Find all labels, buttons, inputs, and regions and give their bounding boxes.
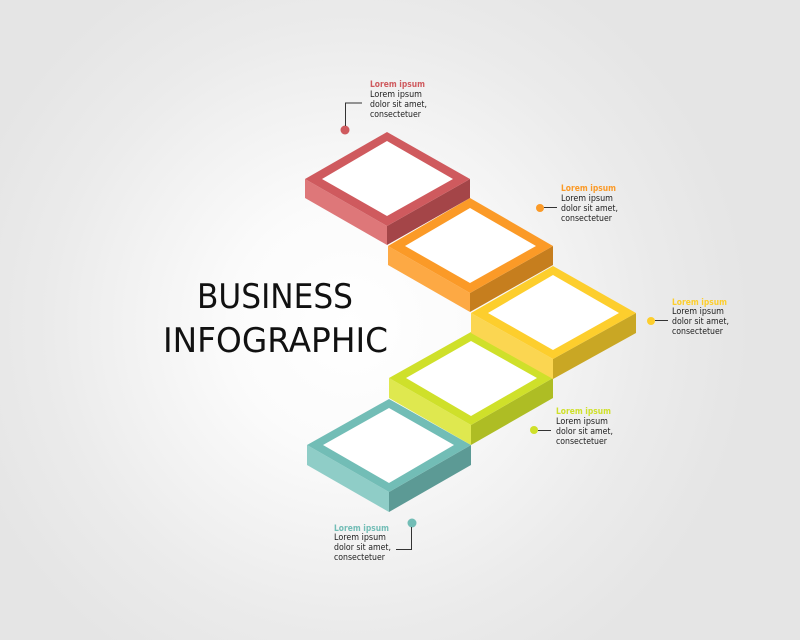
callout: red: dolor sit amet, <box>370 100 427 110</box>
callout: red: Lorem ipsum <box>370 80 425 90</box>
callout: red: Lorem ipsum <box>370 90 422 100</box>
title: INFOGRAPHIC <box>163 321 388 361</box>
callout: teal: dolor sit amet, <box>334 543 391 553</box>
callout: teal <box>334 518 416 563</box>
callout: lime: dolor sit amet, <box>556 427 613 437</box>
callout: orange <box>536 184 618 224</box>
callout: orange: Lorem ipsum <box>561 194 613 204</box>
callout: lime: Lorem ipsum <box>556 407 611 417</box>
callout: yellow: Lorem ipsum <box>672 307 724 317</box>
callout: orange: dolor sit amet, <box>561 204 618 214</box>
callout: teal: Lorem ipsum <box>334 524 389 534</box>
callout: orange: consectetuer <box>561 214 612 224</box>
callout: orange: Lorem ipsum <box>561 184 616 194</box>
callout: yellow: Lorem ipsum <box>672 298 727 308</box>
callout: yellow: dolor sit amet, <box>672 317 729 327</box>
callout: teal: consectetuer <box>334 553 385 563</box>
callout: lime <box>530 407 613 447</box>
step 1: red block <box>305 132 470 245</box>
step 4: lime block <box>389 332 553 445</box>
callout: lime: consectetuer <box>556 437 607 447</box>
callout: yellow <box>647 298 729 337</box>
callout: red: consectetuer <box>370 110 421 120</box>
callout: teal: Lorem ipsum <box>334 533 386 543</box>
step 5: teal block <box>307 399 471 512</box>
title: BUSINESS <box>197 277 353 317</box>
callout: red <box>340 80 427 134</box>
title <box>163 277 388 361</box>
callout: lime: Lorem ipsum <box>556 417 608 427</box>
callout: yellow: consectetuer <box>672 327 723 337</box>
step 2: orange block <box>388 198 553 312</box>
step 3: yellow block <box>471 266 636 379</box>
